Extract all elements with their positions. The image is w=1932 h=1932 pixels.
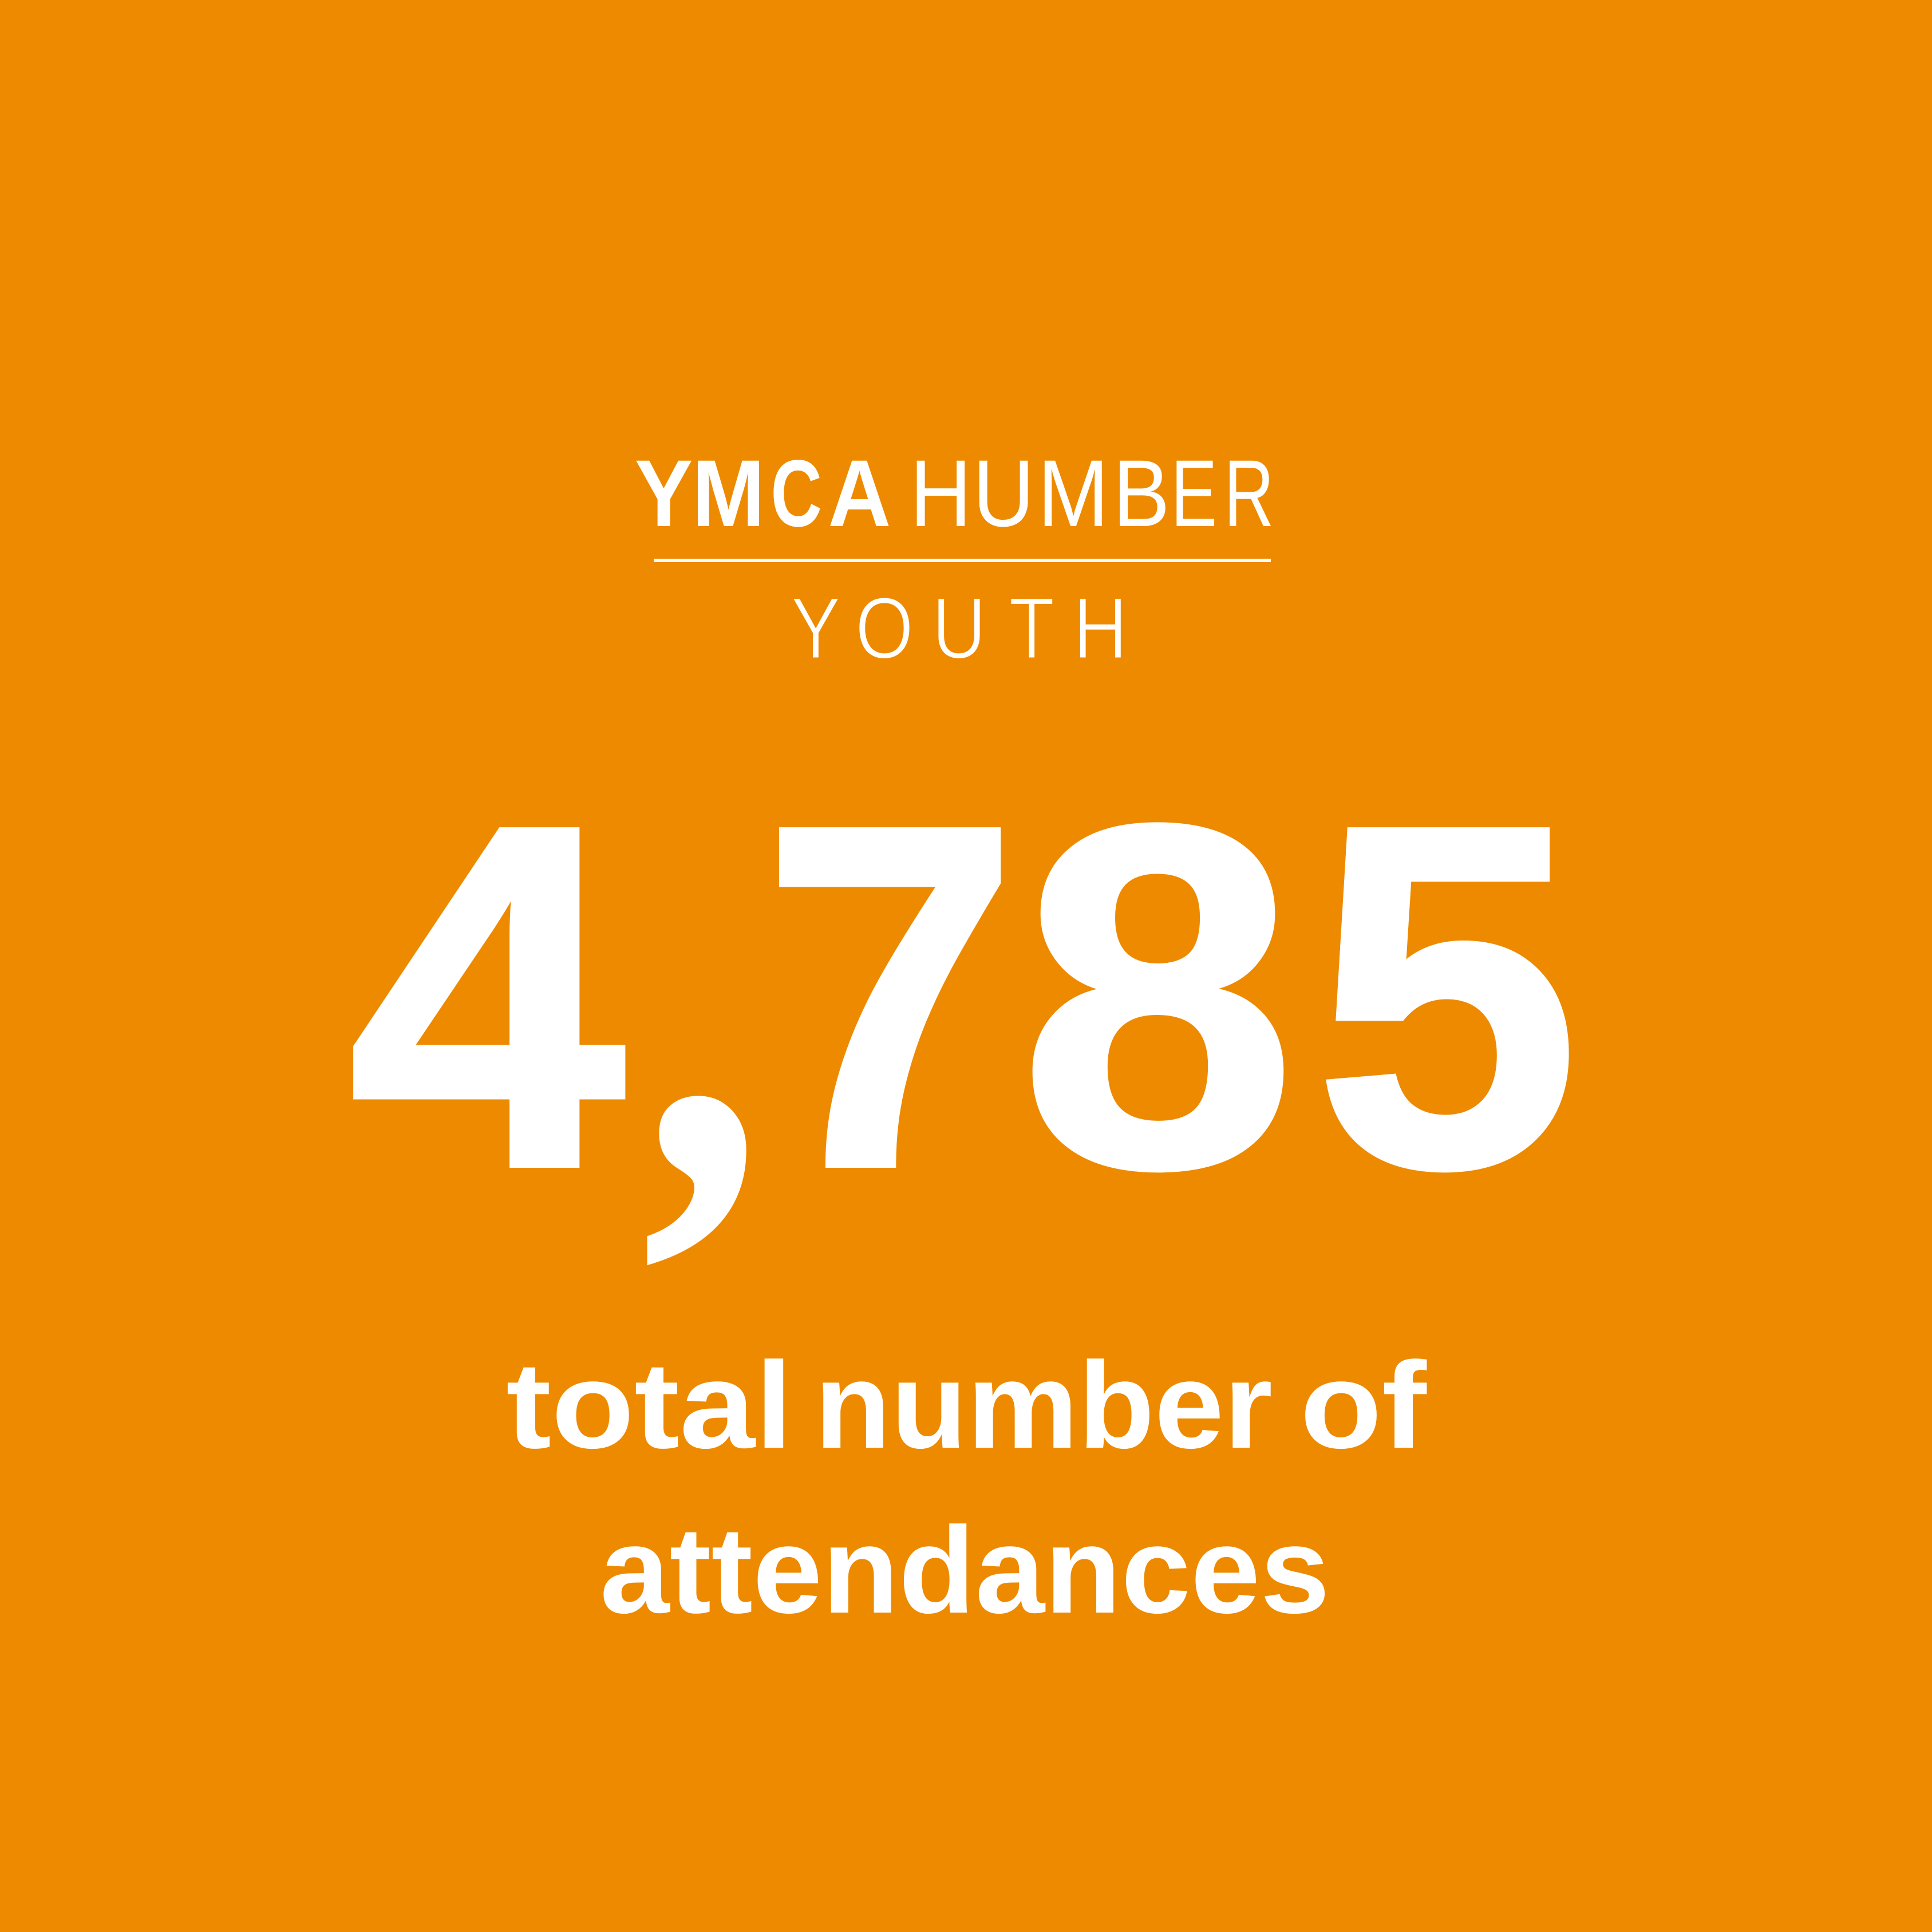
big number: 4,785 (348, 694, 1580, 1296)
caption: total number of attendances: of (1300, 1336, 1428, 1474)
heading: YMCA Humber: HUMB (910, 441, 1170, 547)
caption: total number of attendances: total (506, 1336, 793, 1474)
big number: 4,785: 7 (761, 724, 1019, 1269)
big number: 4,785: , (643, 694, 762, 1296)
subheading: Youth: YOUTH (791, 580, 1128, 677)
caption: total number of attendances: number (815, 1336, 1273, 1474)
heading: YMCA Humber: C (771, 441, 822, 547)
big number: 4,785: 4 (348, 724, 629, 1269)
big number: 4,785: 5 (1314, 724, 1580, 1269)
heading: YMCA Humber: ER (1171, 440, 1274, 546)
heading: YMCA Humber: A (828, 440, 891, 546)
big number: 4,785: 8 (1019, 724, 1297, 1269)
heading: YMCA Humber (635, 440, 1274, 547)
caption: total number of attendances: attendances (600, 1501, 1330, 1639)
heading: YMCA Humber: YM (635, 440, 765, 546)
caption: total number of attendances (506, 1336, 1428, 1639)
